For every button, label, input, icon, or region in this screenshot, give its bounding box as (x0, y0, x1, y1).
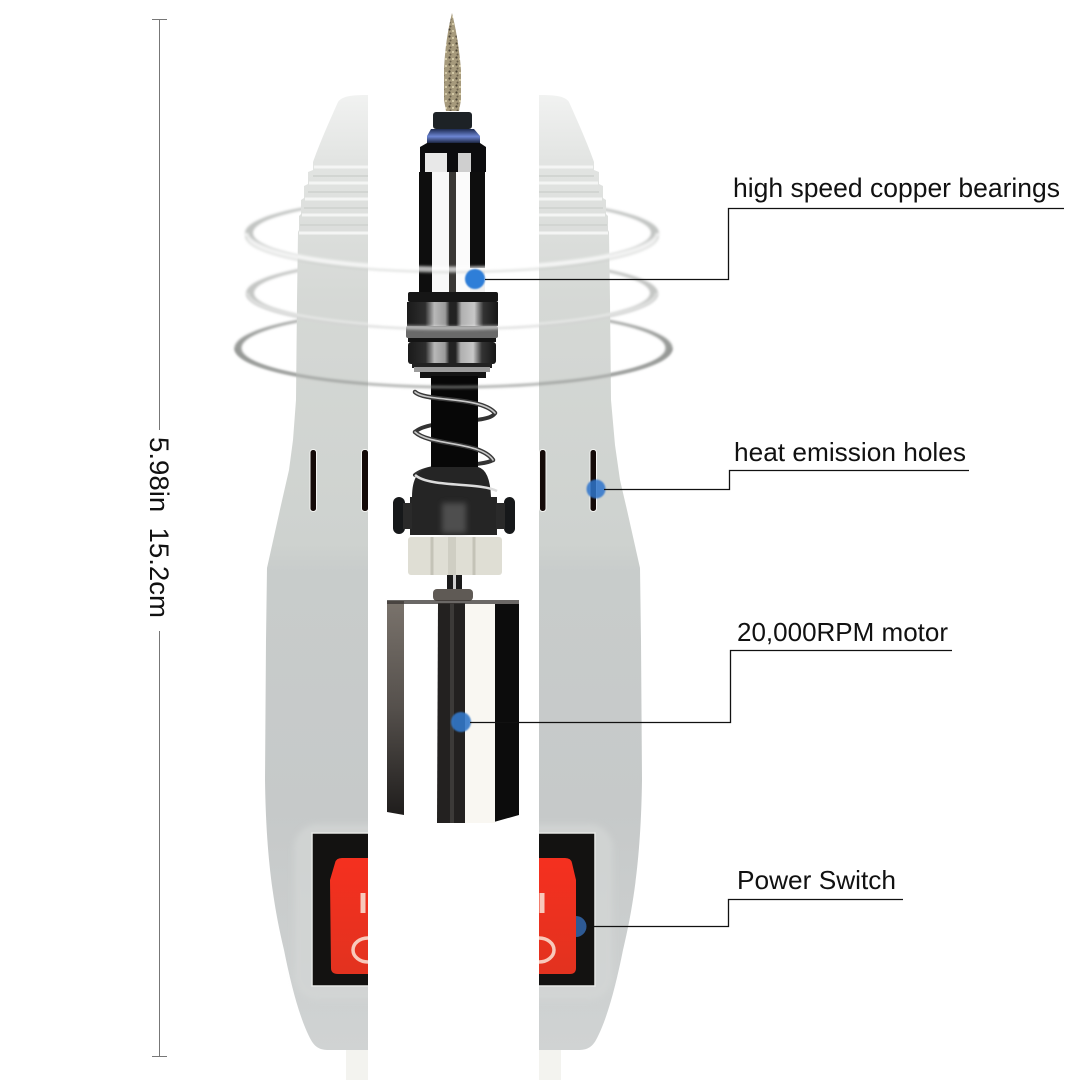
black base (410, 467, 497, 535)
motor spindle and spring (393, 376, 515, 601)
housing silhouette (265, 95, 642, 1050)
callout: 20,000RPM motor (451, 617, 952, 732)
grip ribs (299, 167, 608, 233)
handpiece collet (419, 112, 486, 293)
side knobs (393, 497, 405, 534)
callout: high speed copper bearings: high speed copper bearings (733, 173, 1060, 203)
motion rings: rear arcs behind the housing (234, 196, 672, 388)
switch bezel (294, 824, 613, 1000)
motor shaft (447, 575, 462, 591)
callout: power switch: Power Switch (737, 865, 896, 895)
black spindle (431, 376, 478, 474)
callout: heat emission holes (586, 437, 969, 498)
callout: power switch (576, 865, 903, 937)
callout: 20,000RPM motor: 20,000RPM motor (737, 617, 948, 647)
tail stubs (346, 1050, 368, 1080)
drill housing: two side halves (265, 95, 642, 1080)
callout: heat emission holes: heat emission holes (734, 437, 966, 467)
motor body (387, 600, 519, 823)
bearing collar (406, 292, 498, 378)
white centre cut-out (368, 0, 539, 1080)
motion rings: front arcs over the housing (236, 233, 671, 387)
steel barrel (419, 172, 485, 293)
rocker marks (353, 893, 554, 962)
diamond grinding bit (444, 13, 461, 111)
dimension label: 5.98in 15.2cm (144, 437, 174, 618)
heat emission slots (310, 450, 596, 512)
power switch housing (312, 833, 595, 986)
front spring strands (415, 392, 495, 460)
blue anodised ring (427, 129, 480, 144)
red rocker switch (330, 858, 576, 974)
white plastic gear (408, 537, 502, 575)
callout: high speed copper bearings (465, 173, 1064, 289)
dark nose (433, 112, 472, 129)
rear spring strands (415, 413, 495, 475)
dimension line: overall length (144, 19, 174, 1056)
